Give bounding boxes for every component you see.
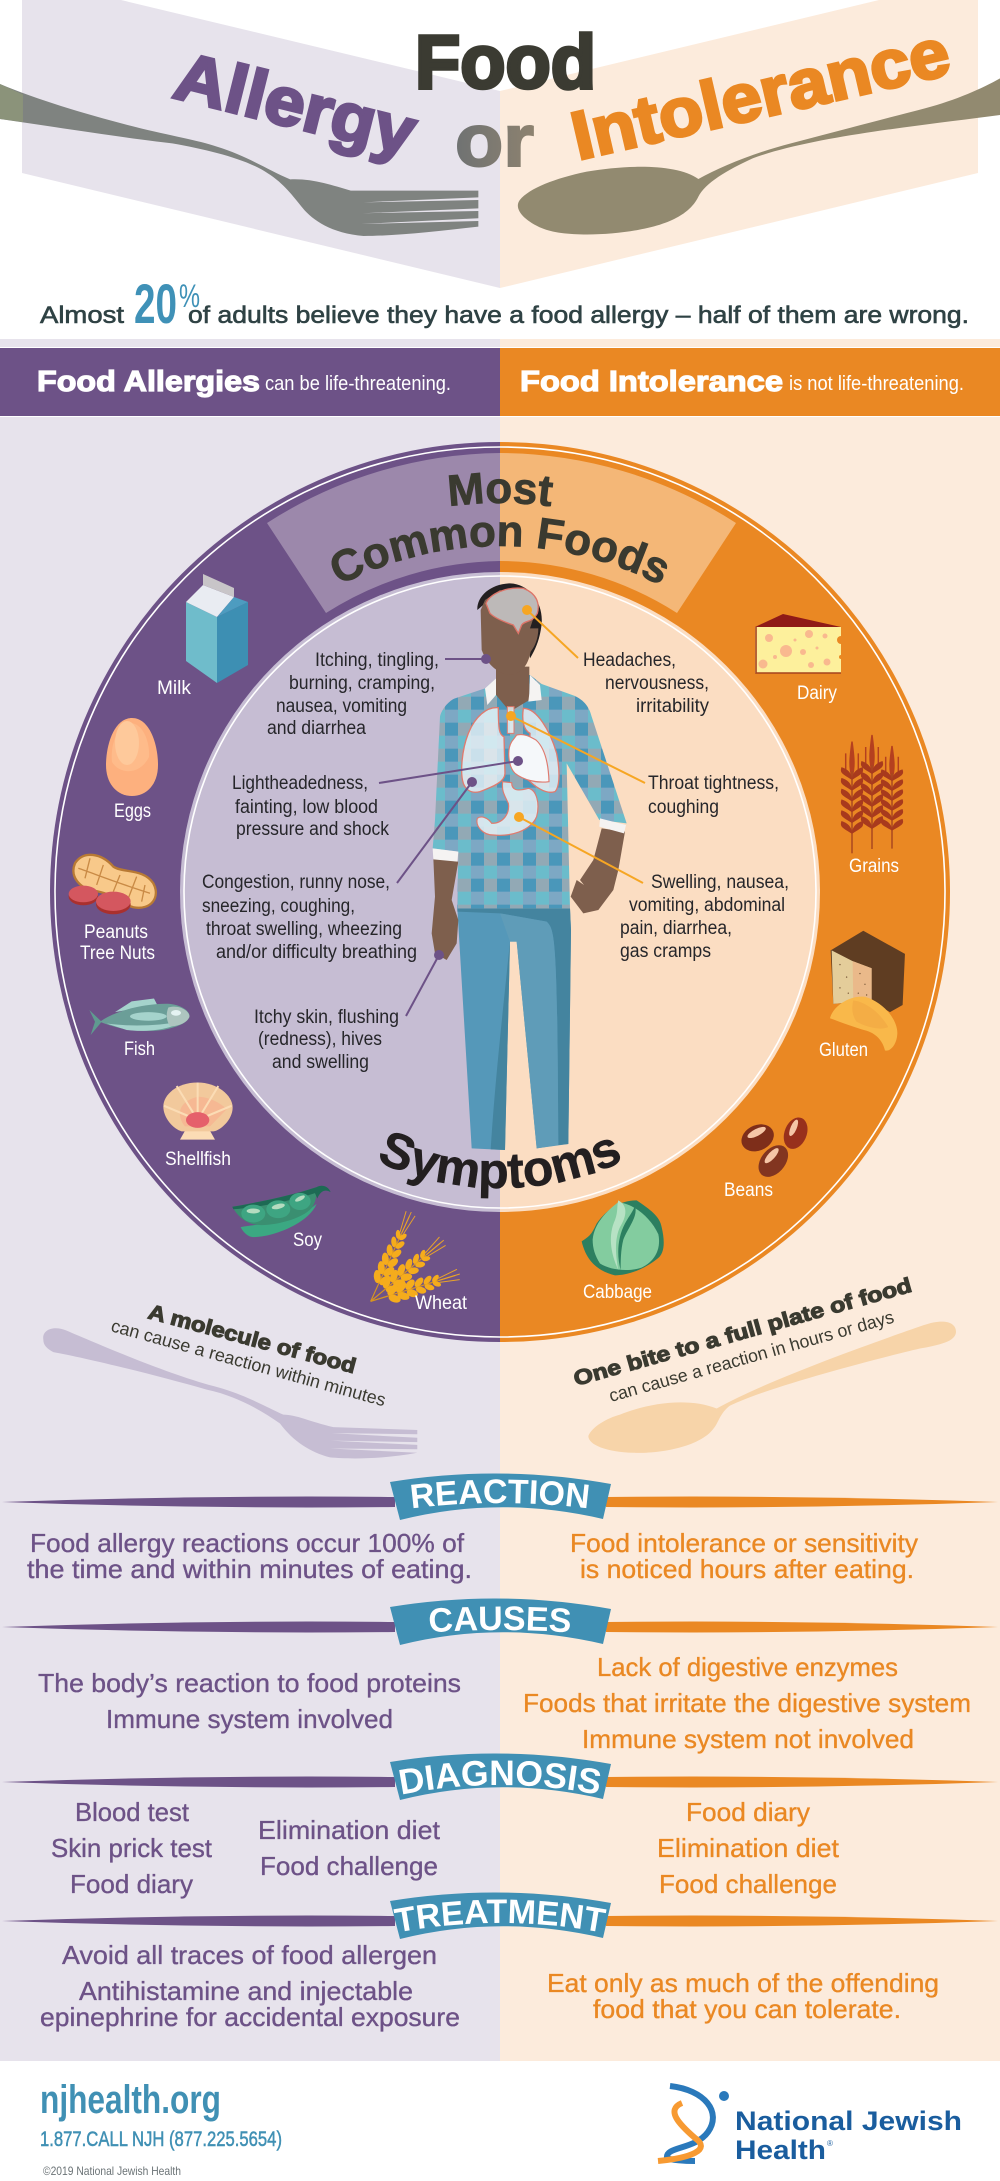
symptoms text: intolerance [583,650,789,962]
plate circle [50,442,950,1342]
section: diagnosis: Skin prick test [51,1833,213,1863]
label: wheat: Wheat [415,1293,468,1314]
footer contact [40,2078,282,2178]
jeans [457,908,571,1150]
symptoms text: allergy: and swelling [272,1052,369,1073]
section: treatment: epinephrine for accidental exposure [40,2002,460,2032]
arms [432,828,625,960]
shirt [433,675,627,908]
brain [486,588,538,633]
footer contact: ©2019 National Jewish Health [43,2164,181,2178]
statistic sentence [40,272,969,335]
section: reaction: the time and within minutes of eating. [27,1554,472,1584]
logo: national jewish health: Health [735,2135,826,2165]
banner: food allergies: Food Allergies [37,366,260,398]
icon: bread and croissant [830,931,905,1051]
symptoms text: intolerance: vomiting, abdominal [629,895,785,916]
section: causes [3,1598,998,1754]
symptoms text: allergy: fainting, low blood [235,797,378,818]
section: causes: Foods that irritate the digestive system [523,1688,971,1718]
symptoms text: intolerance: Headaches, [583,650,676,671]
label: soy: Soy [293,1230,322,1251]
icon: peanuts [69,855,156,914]
section: diagnosis: Food diary [70,1869,193,1899]
label: grains: Grains [849,856,899,877]
logo: national jewish health [658,2086,962,2165]
neck and head [477,583,542,712]
callout: one bite to a full plate: can cause a reaction in hours or days [607,1307,896,1406]
footer contact: njhealth.org [40,2078,221,2122]
banner: food allergies [0,348,500,416]
section: diagnosis: Food challenge [260,1851,438,1881]
label: cabbage: Cabbage [583,1282,652,1303]
symptoms text: allergy: Lightheadedness, [232,773,368,794]
label: milk: Milk [157,678,191,699]
label: beans: Beans [724,1180,773,1201]
banner: food allergies: can be life-threatening. [265,373,451,395]
label: peanuts tree nuts: Peanuts [84,922,148,943]
shirt cuffs [433,818,626,862]
icon: wheat [361,1207,463,1312]
section: reaction [3,1474,998,1584]
icon: beans [738,1113,812,1183]
icon: fish [89,999,189,1035]
section: treatment: Eat only as much of the offending [547,1968,939,1998]
section: reaction: Food intolerance or sensitivity [570,1528,918,1558]
symptoms text: intolerance: nervousness, [605,673,709,694]
icon: cabbage [582,1200,664,1275]
symptoms text: allergy [202,650,439,1073]
symptoms text: allergy: burning, cramping, [289,673,435,694]
symptoms text: allergy: sneezing, coughing, [202,896,355,917]
callout: a molecule of food: can cause a reaction within minutes [109,1316,388,1410]
section: treatment: food that you can tolerate. [593,1994,901,2024]
symptoms text: allergy: and/or difficulty breathing [216,942,417,963]
icon: shell [163,1082,233,1140]
footer contact: 1.877.CALL NJH (877.225.5654) [40,2128,282,2151]
title: Allergy: Allergy [167,38,424,171]
icon: milk carton [186,574,248,683]
callout: a molecule of food: A molecule of food [146,1301,358,1378]
panel: most common foods banner [267,453,736,613]
section: diagnosis: Food challenge [659,1869,837,1899]
logo: national jewish health: ® [827,2139,833,2148]
header chevron backdrop [22,0,978,288]
banner: food intolerance: is not life-threatening. [789,373,964,395]
label: fish: Fish [124,1039,155,1060]
label: peanuts tree nuts [80,922,155,964]
symptoms text: intolerance: pain, diarrhea, [620,918,732,939]
icon: lower spoon [588,1322,956,1453]
section: treatment: Avoid all traces of food allergen [62,1940,437,1970]
symptoms text: allergy: nausea, vomiting [276,696,407,717]
section: diagnosis: DIAGNOSIS [399,1760,600,1794]
section: diagnosis [3,1754,998,1899]
trachea [507,707,514,733]
stomach [477,782,538,835]
symptoms text: intolerance: Swelling, nausea, [651,872,789,893]
symptoms text: allergy: throat swelling, wheezing [206,919,402,940]
symptoms text: allergy: Congestion, runny nose, [202,872,390,893]
icon: lower fork [43,1328,417,1458]
statistic sentence: of adults believe they have a food allergy – half of them are wrong. [188,302,969,329]
section: treatment: Antihistamine and injectable [79,1976,413,2006]
symptoms text: allergy: (redness), hives [258,1029,382,1050]
section: causes: Lack of digestive enzymes [597,1652,898,1682]
connector lines and dots [379,605,645,1016]
heading: symptoms: Symptoms [380,1132,620,1198]
lungs [462,708,559,792]
symptoms text: allergy: Itching, tingling, [315,650,439,671]
symptoms text: intolerance: gas cramps [620,941,711,962]
symptoms text: allergy: Itchy skin, flushing [254,1007,399,1028]
illustration: person with organs [432,583,627,1150]
section: causes: Immune system not involved [582,1724,914,1754]
section: causes: Immune system involved [106,1704,393,1734]
section: treatment: TREATMENT [394,1900,606,1932]
title: Food: Food [415,20,596,105]
title: or: or [455,99,534,182]
section: reaction: Food allergy reactions occur 100% of [30,1528,465,1558]
statistic sentence: 20 [134,272,177,335]
section: diagnosis: Blood test [75,1797,190,1827]
section: diagnosis: Elimination diet [657,1833,840,1863]
section: diagnosis: Elimination diet [258,1815,441,1845]
logo: national jewish health: National Jewish [735,2106,962,2136]
label: shellfish: Shellfish [165,1149,231,1170]
section: diagnosis: Food diary [686,1797,810,1827]
icon: soy pod [232,1186,331,1237]
banner: food intolerance: Food Intolerance [520,366,783,398]
icon: fork silhouette [0,84,478,236]
title: Intolerance: Intolerance [564,14,957,175]
symptoms text: intolerance: coughing [648,797,719,818]
symptoms text: intolerance: Throat tightness, [648,773,779,794]
label: eggs: Eggs [114,801,151,822]
symptoms text: allergy: and diarrhea [267,718,366,739]
heading: common foods: Common Foods [332,518,668,583]
icon: egg [106,718,158,796]
icon: cheese [755,614,845,673]
statistic sentence: % [179,278,200,314]
label: peanuts tree nuts: Tree Nuts [80,943,155,964]
section: causes: The body’s reaction to food proteins [38,1668,461,1698]
banner: food intolerance [500,348,1000,416]
section: causes: CAUSES [430,1606,570,1632]
label: dairy: Dairy [797,683,837,704]
symptoms text: intolerance: irritability [636,696,709,717]
collar [485,675,542,705]
section: reaction: is noticed hours after eating. [580,1554,914,1584]
symptoms text: allergy: pressure and shock [236,819,389,840]
section: reaction: REACTION [411,1479,589,1508]
heading: most: Most [448,472,554,506]
callout: one bite to a full plate [571,1274,914,1406]
icon: grains [841,735,903,853]
callout: one bite to a full plate: One bite to a full plate of food [571,1274,914,1391]
section: treatment [3,1892,998,2032]
statistic sentence: Almost [40,302,124,329]
label: gluten: Gluten [819,1040,868,1061]
heart [509,735,549,782]
icon: spoon silhouette [518,78,1000,235]
